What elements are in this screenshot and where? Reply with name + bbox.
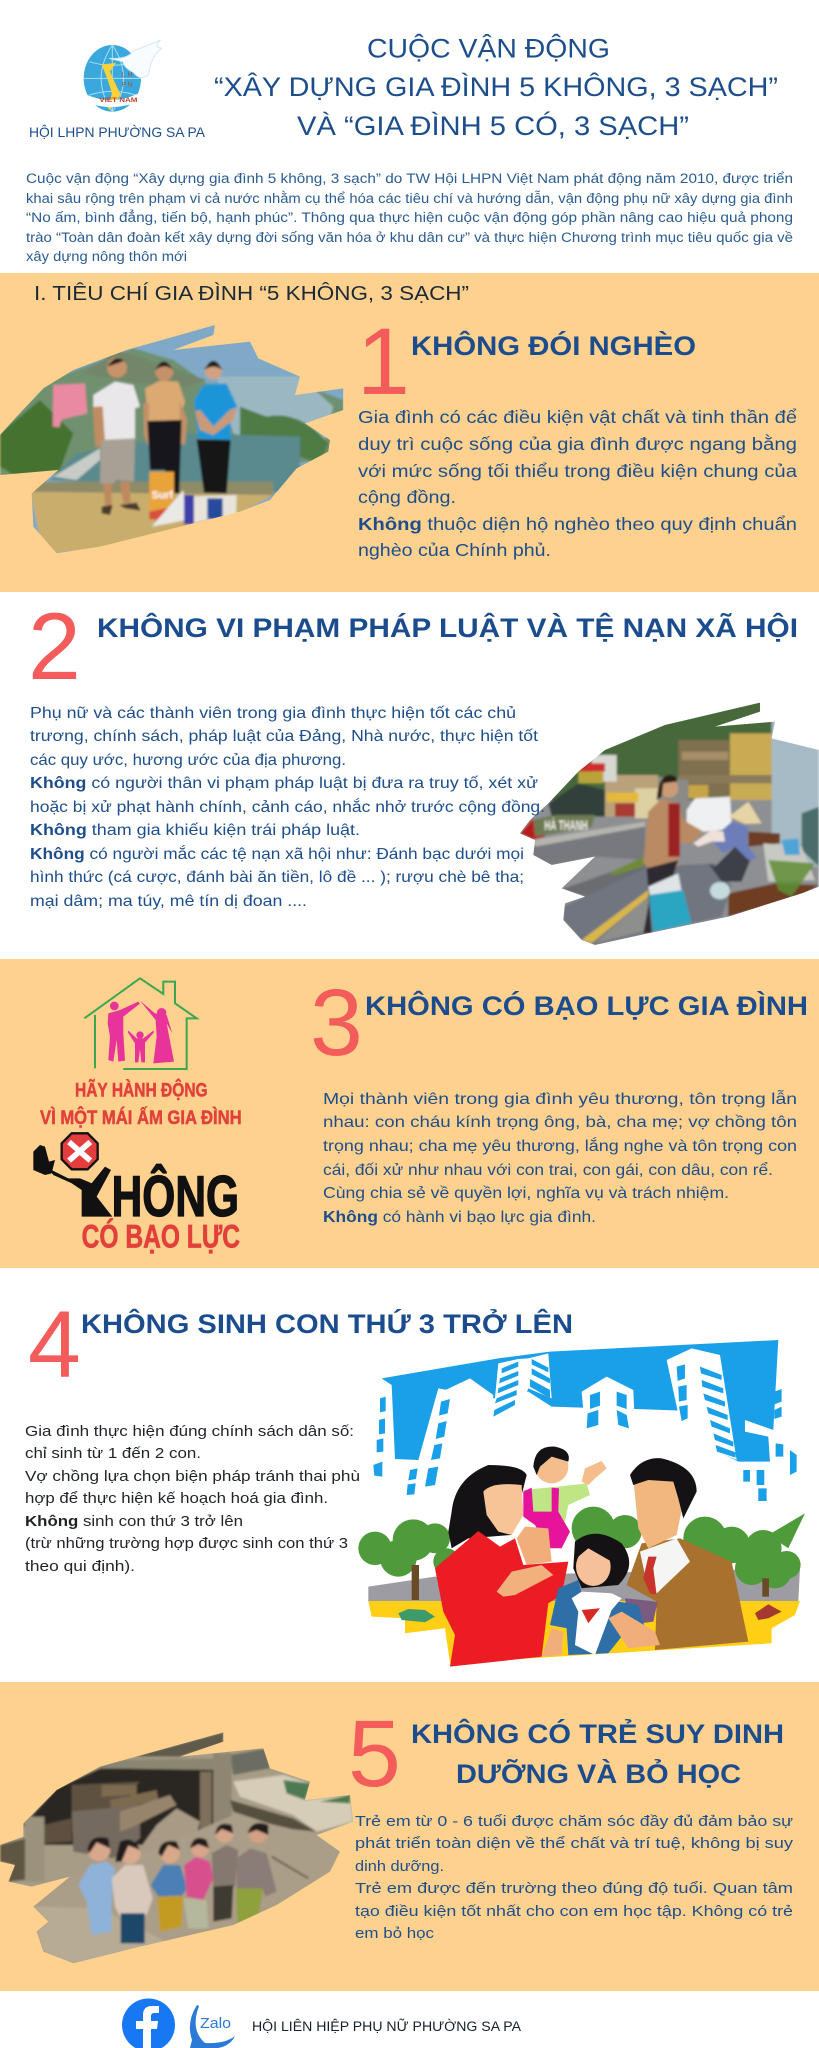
text block 3: Không có hành vi bạo lực gia đình. xyxy=(323,1209,596,1226)
text block 1: duy trì cuộc sống của gia đình được ngang bằng xyxy=(358,433,797,454)
text block 2 xyxy=(30,705,545,910)
intro paragraph: xây dựng nông thôn mới xyxy=(26,249,187,264)
title: VÀ “GIA ĐÌNH 5 CÓ, 3 SẠCH” xyxy=(297,110,689,141)
text block 2: Không có người thân vi phạm pháp luật bị đưa ra truy tố, xét xử xyxy=(30,775,538,792)
father xyxy=(627,1458,748,1650)
number 5: 5 xyxy=(348,1701,401,1807)
text block 5: Trẻ em được đến trường theo đúng độ tuổi. Quan tâm xyxy=(355,1880,793,1897)
intro paragraph: khai sâu rộng trên phạm vi cả nước nhằm cụ thể hóa các tiêu chí và hướng dẫn, vận động phụ nữ xây dựng gia đình xyxy=(26,191,793,206)
icon: green house xyxy=(84,978,197,1069)
intro paragraph xyxy=(26,171,793,264)
photo: women planting on street xyxy=(515,700,819,950)
organisation name: HỘI LHPN PHƯỜNG SA PA xyxy=(29,124,206,140)
intro paragraph: “No ấm, bình đẳng, tiến bộ, hạnh phúc”. Thông qua thực hiện cuộc vận động góp phần nâng cao hiệu quả phong xyxy=(26,210,793,225)
title: CUỘC VẬN ĐỘNG xyxy=(367,32,610,64)
poster: no family violence xyxy=(33,978,242,1254)
photo: women planting on street: HÀ THANH xyxy=(544,817,588,833)
text block 3: nhau: con cháu kính trọng ông, bà, cha mẹ; vợ chồng tôn xyxy=(323,1114,797,1131)
footer xyxy=(122,1998,521,2048)
heading 5 xyxy=(411,1719,784,1789)
text block 1: Không thuộc diện hộ nghèo theo quy định chuẩn xyxy=(358,514,797,534)
number 1: 1 xyxy=(357,309,410,415)
text block 2: các quy ước, hương ước của địa phương. xyxy=(30,752,346,769)
text block 1: nghèo của Chính phủ. xyxy=(358,540,551,560)
slogan: VÌ MỘT MÁI ẤM GIA ĐÌNH xyxy=(40,1105,242,1129)
toddler xyxy=(517,1447,607,1565)
sky and buildings xyxy=(373,1340,797,1501)
number 2: 2 xyxy=(28,594,81,700)
header xyxy=(26,32,793,264)
text block 5: tạo điều kiện tốt nhất cho con em học tập. Không có trẻ xyxy=(355,1903,793,1920)
panel: criterion 4 xyxy=(0,1268,819,1682)
illustration: family of four xyxy=(358,1340,805,1667)
panel: criterion 1 xyxy=(0,273,819,592)
heading 1: KHÔNG ĐÓI NGHÈO xyxy=(411,331,696,361)
text block 5: phát triển toàn diện về thể chất và trí tuệ, không bị suy xyxy=(355,1835,794,1852)
icon: zalo: Zalo xyxy=(200,2015,231,2032)
text block 4: Gia đình thực hiện đúng chính sách dân số: xyxy=(25,1423,354,1440)
photo: family receiving gifts xyxy=(0,320,350,560)
slogan xyxy=(40,1078,242,1129)
poster words: CÓ BẠO LỰC xyxy=(82,1217,240,1254)
poster word: HÔNG xyxy=(112,1164,239,1229)
heading 5: DƯỠNG VÀ BỎ HỌC xyxy=(456,1759,741,1789)
heading 4: KHÔNG SINH CON THỨ 3 TRỞ LÊN xyxy=(81,1309,573,1339)
text block 3: Cùng chia sẻ về quyền lợi, nghĩa vụ và trách nhiệm. xyxy=(323,1185,729,1202)
text block 4: hợp để thực hiện kế hoạch hoá gia đình. xyxy=(25,1490,328,1507)
text block 1: với mức sống tối thiểu trong điều kiện chung của xyxy=(358,461,797,481)
icon: stop figure xyxy=(33,1133,112,1217)
text block 2: Phụ nữ và các thành viên trong gia đình thực hiện tốt các chủ xyxy=(30,705,516,722)
text block 3: cái, đối xử như nhau với con trai, con gái, con dâu, con rể. xyxy=(323,1161,773,1179)
number 3: 3 xyxy=(310,970,363,1076)
text block 4: Vợ chồng lựa chọn biện pháp tránh thai phù xyxy=(25,1468,360,1485)
title: “XÂY DỰNG GIA ĐÌNH 5 KHÔNG, 3 SẠCH” xyxy=(214,71,778,102)
heading 3: KHÔNG CÓ BẠO LỰC GIA ĐÌNH xyxy=(365,991,808,1021)
number 4: 4 xyxy=(28,1292,81,1398)
footer organisation name: HỘI LIÊN HIỆP PHỤ NỮ PHƯỜNG SA PA xyxy=(252,2019,521,2034)
heading 5: KHÔNG CÓ TRẺ SUY DINH xyxy=(411,1719,784,1749)
icon: LHPN logo xyxy=(84,40,161,112)
panel: criterion 5 xyxy=(0,1682,819,1991)
icon: family silhouette xyxy=(108,1001,174,1063)
photo: family receiving gifts: Surf xyxy=(152,489,173,501)
title xyxy=(214,32,778,141)
icon: LHPN logo: LH xyxy=(122,72,133,79)
text block 2: trương, chính sách, pháp luật của Đảng, Nhà nước, thực hiện tốt xyxy=(30,728,539,745)
text block 3 xyxy=(323,1089,797,1226)
text block 1: Gia đình có các điều kiện vật chất và tinh thần để xyxy=(358,407,797,427)
road and trees xyxy=(358,1507,805,1663)
text block 3: Mọi thành viên trong gia đình yêu thương, tôn trọng lẫn xyxy=(323,1089,797,1108)
icon: zalo xyxy=(190,2005,235,2048)
heading 2: KHÔNG VI PHẠM PHÁP LUẬT VÀ TỆ NẠN XÃ HỘI xyxy=(97,613,798,643)
slogan: HÃY HÀNH ĐỘNG xyxy=(75,1078,208,1102)
text block 4 xyxy=(25,1423,360,1575)
text block 5 xyxy=(355,1813,794,1942)
text block 2: Không có người mắc các tệ nạn xã hội như: Đánh bạc dưới mọi xyxy=(30,844,524,863)
text block 5: Trẻ em từ 0 - 6 tuổi được chăm sóc đầy đủ đảm bảo sự xyxy=(355,1813,793,1830)
text block 5: em bỏ học xyxy=(355,1925,435,1942)
mother xyxy=(435,1465,568,1667)
section heading: I. TIÊU CHÍ GIA ĐÌNH “5 KHÔNG, 3 SẠCH” xyxy=(34,282,469,305)
text block 2: Không tham gia khiếu kiện trái pháp luật. xyxy=(30,822,360,839)
children xyxy=(78,1862,115,1935)
text block 2: hoặc bị xử phạt hành chính, cảnh cáo, nhắc nhở trước cộng đồng. xyxy=(30,797,545,816)
text block 4: Không sinh con thứ 3 trở lên xyxy=(25,1513,243,1530)
icon: LHPN logo: PN xyxy=(122,82,133,89)
text block 4: theo qui định). xyxy=(25,1558,135,1575)
text block 1: cộng đồng. xyxy=(358,487,456,507)
text block 3: trọng nhau; cha mẹ yêu thương, lắng nghe và tôn trọng con xyxy=(323,1136,797,1155)
text block 2: mại dâm; ma túy, mê tín dị đoan .... xyxy=(30,893,307,910)
panel: criterion 2 xyxy=(30,612,819,945)
icon: LHPN logo: VIET NAM xyxy=(99,98,137,104)
text block 2: hình thức (cá cược, đánh bài ăn tiền, lô đề ... ); rượu chè bê tha; xyxy=(30,869,524,886)
photo: children by lumber shed xyxy=(0,1725,355,1970)
icon: facebook xyxy=(122,1998,175,2048)
intro paragraph: Cuộc vận động “Xây dựng gia đình 5 không, 3 sạch” do TW Hội LHPN Việt Nam phát động năm 2010, được triển xyxy=(26,171,793,186)
text block 4: chỉ sinh từ 1 đến 2 con. xyxy=(25,1445,201,1462)
text block 5: dinh dưỡng. xyxy=(355,1858,444,1875)
schoolgirl xyxy=(542,1534,660,1657)
panel: criterion 3 xyxy=(0,959,819,1268)
text block 4: (trừ những trường hợp được sinh con thứ 3 xyxy=(25,1535,348,1552)
intro paragraph: trào “Toàn dân đoàn kết xây dựng đời sống văn hóa ở khu dân cư” và thực hiện Chương trình mục tiêu quốc gia về xyxy=(26,230,793,245)
text block 1 xyxy=(358,407,797,560)
